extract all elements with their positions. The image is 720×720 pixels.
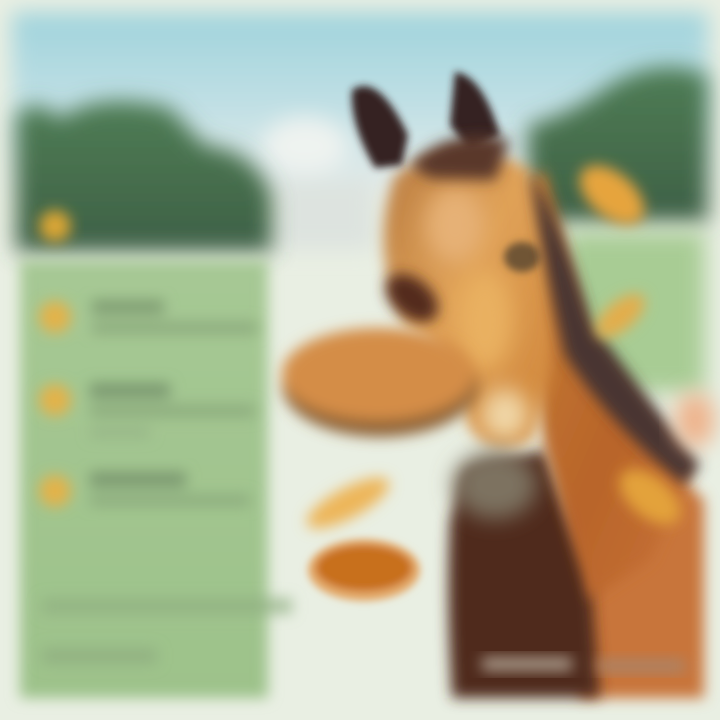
horse eye [504,242,540,272]
list item 3 [39,472,250,507]
horse body: orange right [560,400,704,698]
leaf: upper right [569,154,655,236]
horse face highlights [425,187,529,441]
sky [12,12,708,250]
chin shadow [453,451,537,519]
bowl of feed [282,328,478,437]
trees: left [16,101,272,252]
panel: green text column [20,260,268,698]
horse forelock [410,136,510,180]
horse head [384,151,552,447]
leaf: lower left [300,468,396,538]
caption on body [482,657,685,672]
horse neck [505,170,690,600]
leaf: on neck [610,459,690,535]
meadow: right [565,232,705,392]
horse body: dark lower left [448,450,600,698]
leaf: middle right [588,286,652,346]
list item 2 [39,383,255,437]
trees: right [528,67,708,222]
footer text block [42,598,292,664]
horse mane [530,170,700,485]
icon: top bullet [39,210,71,242]
peach accent, right edge [675,392,715,448]
small feed dish [308,539,420,601]
horse nostril [377,264,447,332]
list item 1 [39,300,257,334]
horse ears [352,72,500,168]
